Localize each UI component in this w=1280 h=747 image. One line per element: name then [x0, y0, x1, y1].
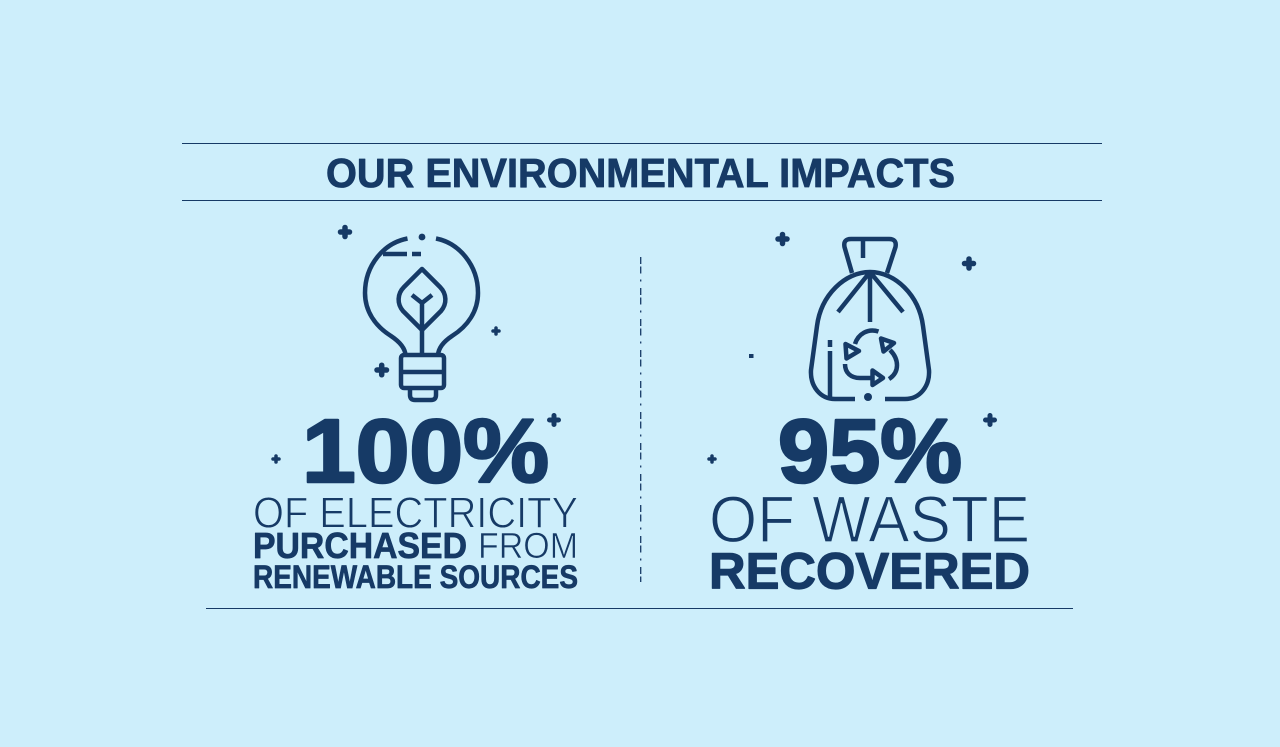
value: 95%: 95%: [778, 402, 962, 502]
label: of electricity purchased from renewable sources: PURCHASED: [253, 525, 467, 566]
panel: waste: [709, 239, 1030, 600]
icon: trash bag with recycling arrows: [811, 239, 929, 401]
label: of electricity purchased from renewable sources: FROM: [478, 525, 578, 566]
label: of waste recovered: [709, 482, 1030, 600]
label: of waste recovered: OF WASTE: [709, 482, 1030, 556]
label: of electricity purchased from renewable sources: [253, 488, 578, 595]
value: 100%: 100%: [302, 402, 549, 502]
label: of waste recovered: RECOVERED: [709, 542, 1030, 600]
icon: light bulb with leaf: [365, 234, 478, 400]
label: of electricity purchased from renewable sources: OF ELECTRICITY: [253, 488, 578, 538]
panel: electricity: [253, 234, 578, 595]
title: OUR ENVIRONMENTAL IMPACTS: [326, 150, 955, 196]
sparkles: [273, 228, 994, 462]
label: of electricity purchased from renewable sources: RENEWABLE SOURCES: [253, 559, 578, 595]
